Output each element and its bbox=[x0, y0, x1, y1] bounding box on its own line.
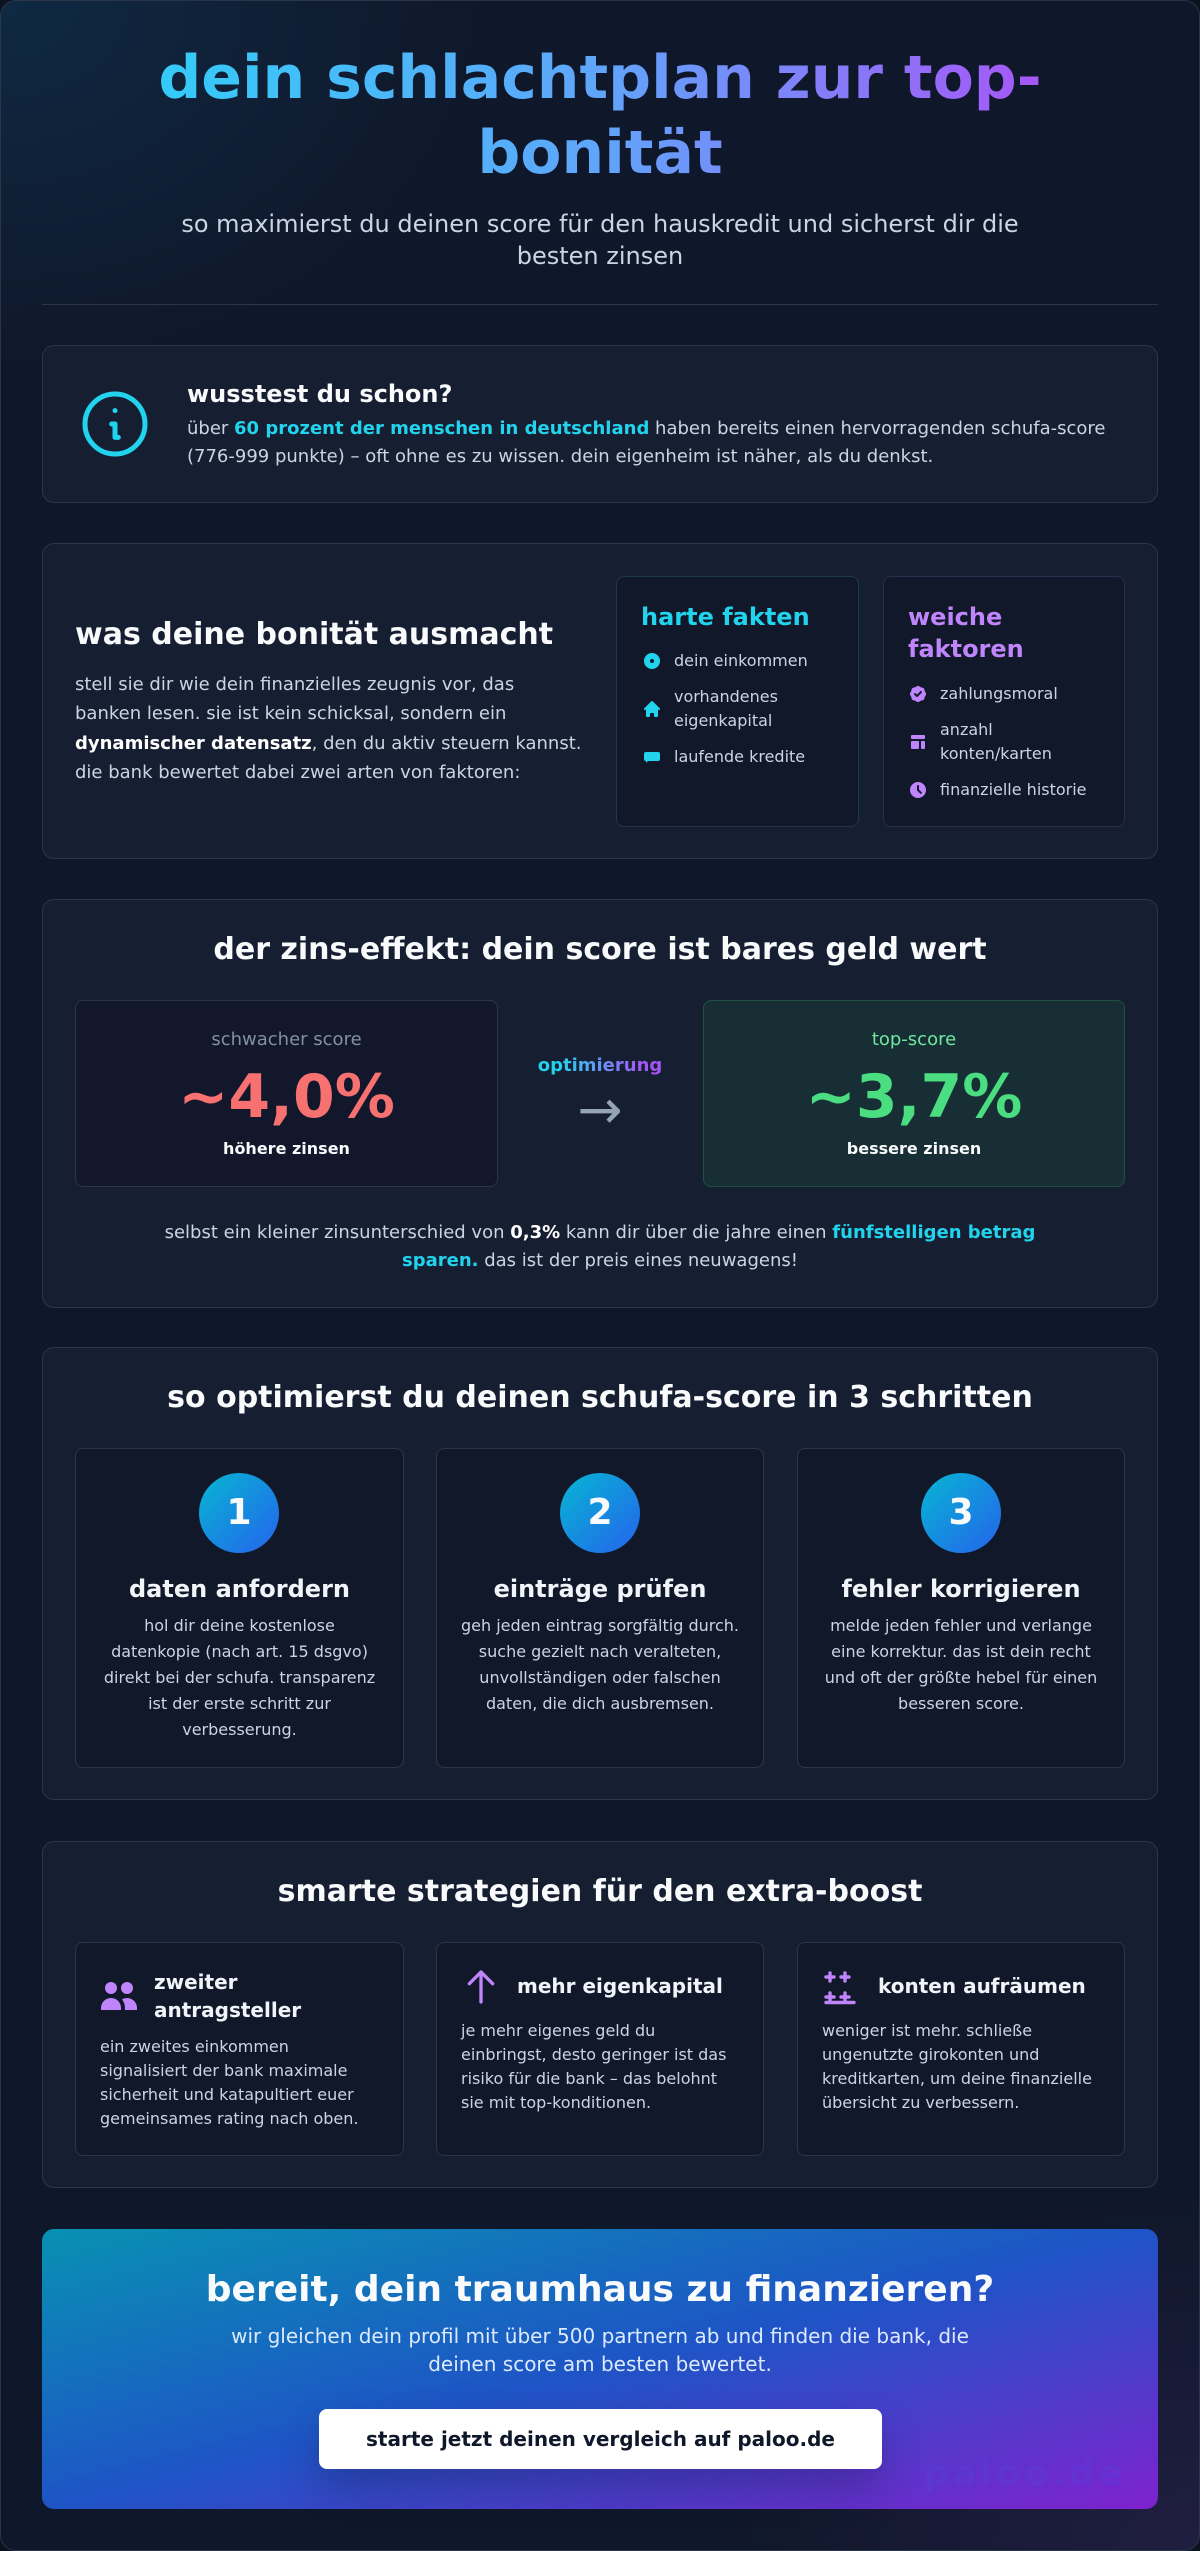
step text: ist der erste schritt zur bbox=[148, 1694, 331, 1713]
card: top-score bbox=[703, 1000, 1125, 1187]
step text: melde jeden fehler und verlange bbox=[830, 1616, 1092, 1635]
strategy text: ein zweites einkommen bbox=[100, 2037, 289, 2056]
number bbox=[199, 1473, 279, 1553]
step text bbox=[825, 1616, 1097, 1713]
strategy text: kreditkarten, um deine finanzielle bbox=[822, 2069, 1092, 2088]
cta text: deinen score am besten bewertet. bbox=[428, 2352, 772, 2376]
panel: bonität bbox=[42, 543, 1158, 859]
note bbox=[165, 1222, 1035, 1271]
item: historie: finanzielle historie bbox=[940, 780, 1087, 799]
item: einkommen: dein einkommen bbox=[674, 651, 808, 670]
step heading: fehler korrigieren bbox=[841, 1575, 1081, 1603]
heading: so optimierst du deinen schufa-score in 3 schritten bbox=[167, 1380, 1033, 1415]
item: konten: anzahl bbox=[940, 720, 993, 739]
strategy heading: mehr eigenkapital bbox=[517, 1974, 723, 1998]
note: sparen. das ist der preis eines neuwagens! bbox=[402, 1250, 798, 1271]
card heading: weiche bbox=[908, 603, 1002, 631]
cta text bbox=[231, 2324, 969, 2376]
strategy 2 bbox=[436, 1942, 764, 2156]
panel: wusstest du schon bbox=[42, 345, 1158, 503]
strategy heading bbox=[154, 1970, 302, 2022]
title: bonität bbox=[477, 118, 723, 188]
button: starte jetzt deinen vergleich auf paloo.de bbox=[366, 2427, 835, 2451]
step 3 bbox=[797, 1448, 1125, 1768]
strategy heading: zweiter bbox=[154, 1970, 238, 1994]
title: dein schlachtplan zur top- bbox=[158, 43, 1042, 113]
item: zahlungsmoral: zahlungsmoral bbox=[940, 684, 1058, 703]
strategy text: sie mit top-konditionen. bbox=[461, 2093, 651, 2112]
icon: info bbox=[82, 392, 148, 456]
item: kredite: laufende kredite bbox=[674, 747, 805, 766]
panel: zins-effekt bbox=[42, 899, 1158, 1308]
step text: datenkopie (nach art. 15 dsgvo) bbox=[111, 1642, 368, 1661]
icon: arrow up bbox=[468, 1970, 494, 2004]
strategy text: gemeinsames rating nach oben. bbox=[100, 2109, 358, 2128]
strategy text: sicherheit und katapultiert euer bbox=[100, 2085, 354, 2104]
item: konten: konten/karten bbox=[940, 744, 1052, 763]
strategy text: ungenutzte girokonten und bbox=[822, 2045, 1039, 2064]
step text: unvollständigen oder falschen bbox=[479, 1668, 721, 1687]
strategy 1 bbox=[75, 1942, 404, 2156]
subtitle: so maximierst du deinen score für den hauskredit und sicherst dir die bbox=[181, 210, 1019, 238]
step text: verbesserung. bbox=[182, 1720, 297, 1739]
body text: banken lesen. sie ist kein schicksal, sondern ein bbox=[75, 703, 506, 724]
value: ~4,0% bbox=[178, 1062, 395, 1132]
panel: 3 schritte bbox=[42, 1347, 1158, 1800]
cta heading: bereit, dein traumhaus zu finanzieren? bbox=[206, 2269, 994, 2310]
cta text: wir gleichen dein profil mit über 500 partnern ab und finden die bank, die bbox=[231, 2324, 969, 2348]
arrow: optimierung bbox=[538, 1055, 662, 1141]
strategy text bbox=[100, 2037, 358, 2128]
caption: höhere zinsen bbox=[223, 1139, 350, 1158]
step text bbox=[461, 1616, 739, 1713]
info text bbox=[187, 418, 1105, 467]
strategy text: weniger ist mehr. schließe bbox=[822, 2021, 1032, 2040]
card: schwacher score bbox=[75, 1000, 498, 1187]
strategy text: einbringst, desto geringer ist das bbox=[461, 2045, 726, 2064]
item: eigenkapital: eigenkapital bbox=[674, 711, 772, 730]
body text: dynamischer datensatz, den du aktiv steuern kannst. bbox=[75, 733, 582, 754]
strategy text bbox=[460, 2021, 726, 2112]
strategy heading: konten aufräumen bbox=[878, 1974, 1086, 1998]
note: selbst ein kleiner zinsunterschied von 0,3% kann dir über die jahre einen fünfstelligen betrag bbox=[165, 1222, 1035, 1243]
step heading: daten anfordern bbox=[129, 1575, 350, 1603]
icon: users bbox=[101, 1982, 137, 2010]
step heading: einträge prüfen bbox=[494, 1575, 706, 1603]
item: eigenkapital bbox=[644, 687, 778, 730]
number: 1 bbox=[226, 1492, 252, 1533]
card heading bbox=[908, 603, 1024, 663]
number: 3 bbox=[948, 1492, 974, 1533]
body text: die bank bewertet dabei zwei arten von faktoren: bbox=[75, 762, 520, 783]
button bbox=[319, 2409, 882, 2469]
value: ~3,7% bbox=[806, 1062, 1022, 1132]
strategy text: übersicht zu verbessern. bbox=[822, 2093, 1019, 2112]
step text: geh jeden eintrag sorgfältig durch. bbox=[461, 1616, 739, 1635]
step 1 bbox=[75, 1448, 404, 1768]
info text: über 60 prozent der menschen in deutschland haben bereits einen hervorragenden schufa-score bbox=[187, 418, 1105, 439]
item: konten bbox=[911, 720, 1052, 763]
step text: suche gezielt nach veralteten, bbox=[479, 1642, 721, 1661]
strategy text: signalisiert der bank maximale bbox=[100, 2061, 347, 2080]
strategy 3 bbox=[797, 1942, 1125, 2156]
step text: hol dir deine kostenlose bbox=[144, 1616, 335, 1635]
arrow label: optimierung bbox=[538, 1055, 662, 1076]
watermark: paloo.de bbox=[923, 2453, 1126, 2494]
heading: smarte strategien für den extra-boost bbox=[278, 1874, 922, 1909]
step text: daten, die dich ausbremsen. bbox=[486, 1694, 714, 1713]
arrow glyph: → bbox=[577, 1078, 623, 1141]
step text: und oft der größte hebel für einen bbox=[825, 1668, 1097, 1687]
panel: strategien bbox=[42, 1841, 1158, 2188]
heading: was deine bonität ausmacht bbox=[75, 617, 553, 652]
label: schwacher score bbox=[211, 1029, 362, 1050]
icon: tidy bbox=[824, 1971, 856, 2004]
card: weiche faktoren bbox=[883, 576, 1125, 827]
info text: (776-999 punkte) – oft ohne es zu wissen. dein eigenheim ist näher, als du denkst. bbox=[187, 446, 933, 467]
card: harte fakten bbox=[616, 576, 859, 827]
label: top-score bbox=[872, 1029, 956, 1050]
strategy heading: antragsteller bbox=[154, 1998, 301, 2022]
step text: besseren score. bbox=[898, 1694, 1024, 1713]
heading: der zins-effekt: dein score ist bares geld wert bbox=[213, 932, 987, 967]
strategy text bbox=[822, 2021, 1092, 2112]
caption: bessere zinsen bbox=[847, 1139, 981, 1158]
info heading: wusstest du schon? bbox=[187, 380, 452, 408]
strategy text: je mehr eigenes geld du bbox=[461, 2021, 655, 2040]
number bbox=[560, 1473, 640, 1553]
body text: stell sie dir wie dein finanzielles zeugnis vor, das bbox=[75, 674, 514, 695]
step text: eine korrektur. das ist dein recht bbox=[831, 1642, 1091, 1661]
number: 2 bbox=[587, 1492, 613, 1533]
card heading: faktoren bbox=[908, 635, 1024, 663]
strategy text: risiko für die bank – das belohnt bbox=[461, 2069, 717, 2088]
title bbox=[149, 41, 1051, 191]
arrow label bbox=[512, 1053, 688, 1079]
header bbox=[158, 43, 1042, 270]
step 2 bbox=[436, 1448, 764, 1768]
item: eigenkapital: vorhandenes bbox=[674, 687, 778, 706]
step text: direkt bei der schufa. transparenz bbox=[104, 1668, 375, 1687]
number bbox=[921, 1473, 1001, 1553]
card heading: harte fakten bbox=[641, 603, 810, 631]
subtitle bbox=[181, 210, 1019, 270]
step text bbox=[104, 1616, 375, 1739]
body text bbox=[75, 674, 582, 783]
subtitle: besten zinsen bbox=[517, 242, 683, 270]
panel: cta bbox=[42, 2229, 1158, 2509]
